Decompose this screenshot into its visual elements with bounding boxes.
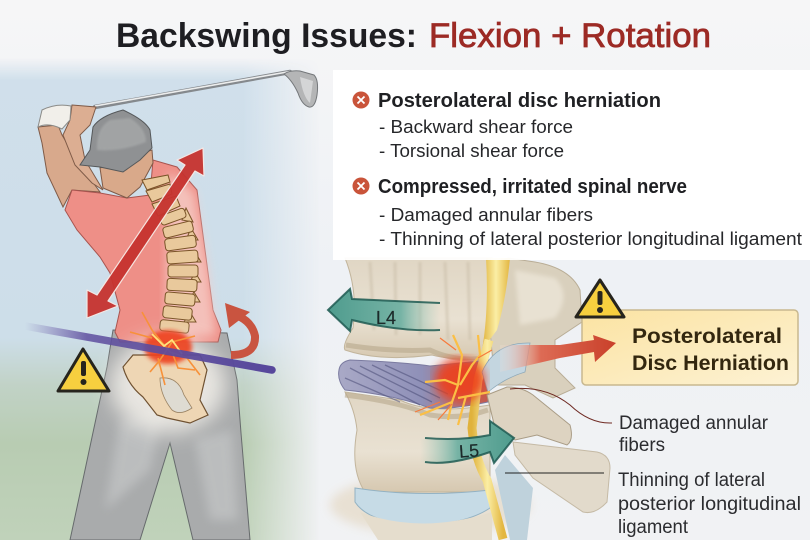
label: thinning of lateral posterior longitudinal ligament: posterior longitudinal (618, 494, 801, 515)
L5 rotation arrow (420, 421, 514, 463)
upper facet bones (490, 258, 582, 398)
item: disc herniation: Posterolateral disc herniation (378, 90, 661, 112)
lower vertebra L5 (345, 392, 490, 492)
face (100, 150, 153, 198)
info card (333, 70, 810, 260)
curved rotation arrow (225, 303, 255, 355)
illustration: golfer in backswing (38, 71, 318, 540)
leader line: thinning ligament (505, 472, 604, 474)
pants (70, 330, 250, 540)
icon: x mark (352, 92, 370, 108)
pain burst (415, 335, 492, 425)
item: disc herniation (352, 90, 661, 161)
label: thinning of lateral posterior longitudinal ligament: ligament (618, 517, 689, 538)
L4-L5 disc (339, 360, 490, 408)
item: compressed nerve: - Damaged annular fibers (379, 205, 593, 225)
raised arm (38, 125, 100, 207)
warning icon right (576, 280, 624, 317)
soft shadow surroundings (330, 475, 530, 535)
purple pelvic rotation band (25, 326, 272, 370)
pelvis glow (110, 337, 226, 433)
golf club (95, 71, 318, 107)
sacrum (160, 378, 192, 413)
shirt shading (165, 172, 216, 338)
bottom vertebra (360, 512, 492, 540)
cap highlight (97, 118, 146, 150)
item: disc herniation: - Torsional shear force (379, 141, 564, 161)
pain burst (130, 312, 200, 385)
background: golf course scene (0, 58, 320, 540)
L5 rim (345, 395, 488, 417)
item: compressed nerve (352, 176, 802, 249)
label: damaged annular fibers: Damaged annular (619, 413, 769, 434)
icon: x mark (352, 178, 370, 194)
upper vertebra L4 (344, 258, 492, 360)
pants highlights (105, 405, 238, 520)
pelvis (123, 355, 208, 423)
herniation direction arrow (500, 335, 616, 372)
label: damaged annular fibers: fibers (619, 435, 665, 456)
shirt (65, 160, 221, 342)
ligament fibres (495, 455, 533, 540)
upper facet highlight (515, 270, 564, 325)
callout: posterolateral disc herniation: Disc Herniation (632, 351, 789, 375)
title: Backswing Issues: (116, 17, 417, 55)
item: compressed nerve: - Thinning of lateral posterior longitudinal ligament (379, 229, 802, 249)
cap (80, 110, 152, 172)
spine (142, 175, 201, 333)
callout: posterolateral disc herniation (582, 310, 798, 385)
glove (38, 105, 71, 129)
disc bulge (482, 343, 530, 392)
L4 rim (346, 345, 486, 359)
double-headed red force arrow (87, 148, 204, 318)
spine anatomy illustration (330, 258, 610, 540)
label: thinning of lateral posterior longitudinal ligament: Thinning of lateral (618, 470, 765, 491)
leader line: damaged annular fibers (510, 388, 612, 423)
L4 label: L4 (376, 308, 396, 328)
lower facet bones (487, 387, 610, 513)
item: compressed nerve: Compressed, irritated spinal nerve (378, 176, 687, 198)
forearm and hand (63, 105, 103, 190)
L5 label: L5 (458, 440, 480, 462)
L4 rotation arrow (328, 289, 440, 331)
L4 bone texture (370, 262, 470, 340)
item: disc herniation: - Backward shear force (379, 117, 573, 137)
lower disc (355, 488, 490, 525)
warning icon left (58, 349, 109, 391)
spinal nerve (472, 258, 510, 539)
title: Flexion + Rotation (429, 17, 711, 55)
callout: posterolateral disc herniation: Posterolateral (632, 324, 782, 348)
